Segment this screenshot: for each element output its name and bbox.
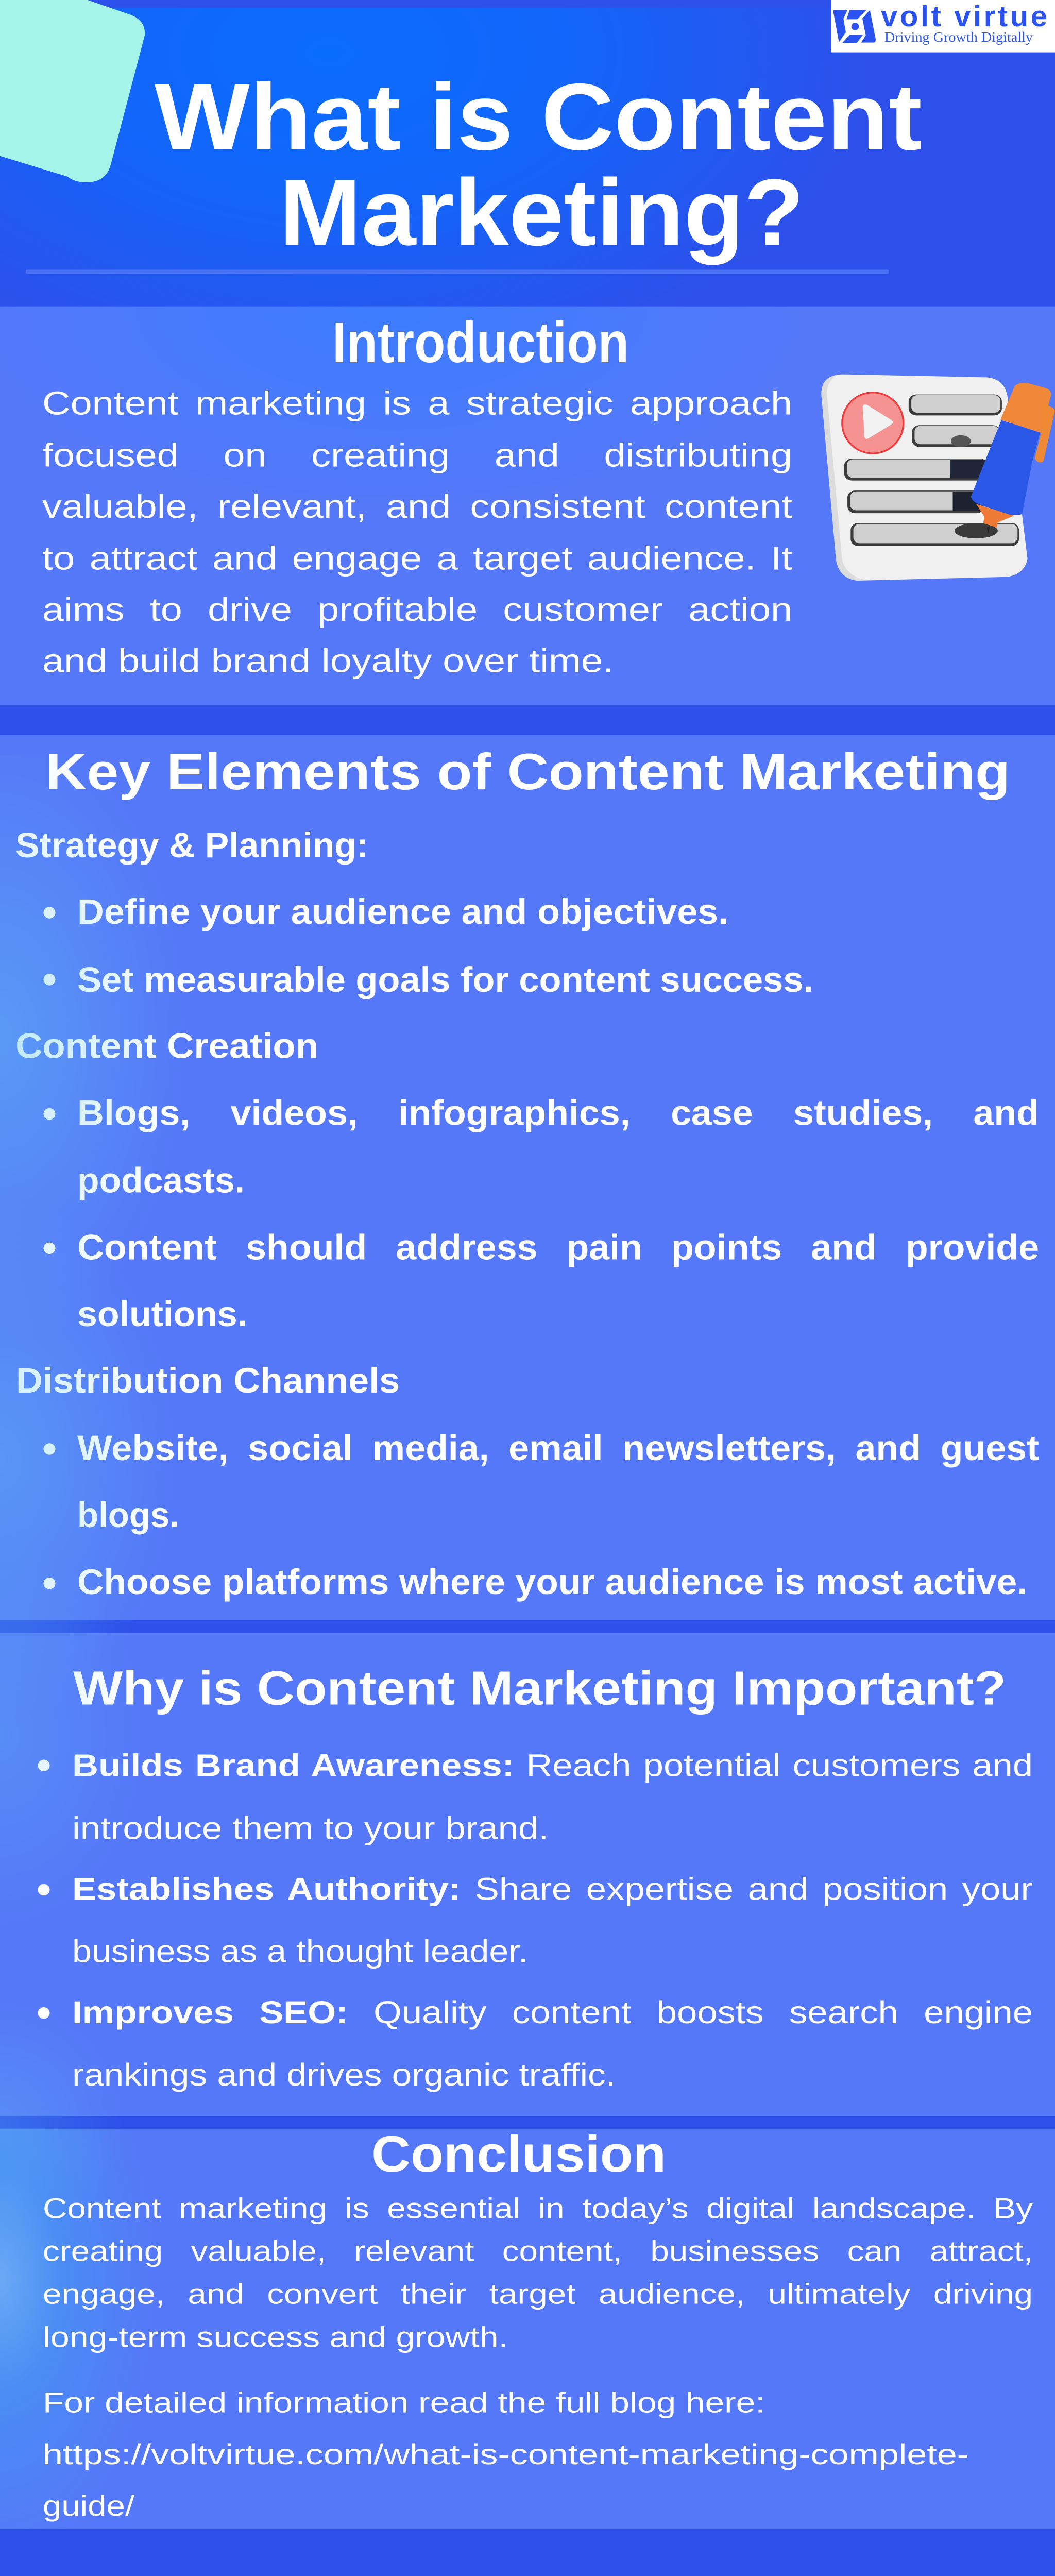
title underline bbox=[26, 269, 889, 274]
panel: header bbox=[0, 0, 1055, 307]
list: benefits: Builds Brand Awareness: Reach potential customers and bbox=[72, 1748, 1033, 1783]
group: Strategy & Planning: Define your audience and objectives. bbox=[77, 892, 728, 931]
heading: Why is Content Marketing Important?: Why is Content Marketing Important? bbox=[73, 1662, 1006, 1715]
decorative mint shape bbox=[0, 0, 145, 182]
group: Strategy & Planning bbox=[15, 826, 813, 999]
group: Distribution Channels bbox=[16, 1361, 1039, 1601]
group: Content Creation: Blogs, videos, infographics, case studies, and bbox=[77, 1093, 1039, 1132]
panel: key elements bbox=[0, 735, 1055, 1620]
group: Distribution Channels: blogs. bbox=[77, 1495, 179, 1535]
text: blog link: https://voltvirtue.com/what-is-content-marketing-complete- bbox=[43, 2438, 969, 2471]
text: introduction paragraph: Content marketing is a strategic approach bbox=[42, 384, 792, 421]
icon: document with play button and marker pen bbox=[821, 374, 1055, 581]
group: Content Creation: solutions. bbox=[77, 1295, 247, 1334]
list: benefits: introduce them to your brand. bbox=[72, 1811, 549, 1846]
logo name: volt virtue bbox=[881, 0, 1047, 32]
group: Content Creation: Content should address pain points and provide bbox=[77, 1228, 1039, 1267]
list: benefits: Establishes Authority: Share expertise and position your bbox=[72, 1872, 1033, 1907]
text: conclusion paragraph: long-term success and growth. bbox=[43, 2321, 508, 2353]
text: conclusion paragraph bbox=[43, 2193, 1033, 2353]
text: introduction paragraph: focused on creating and distributing bbox=[42, 436, 792, 473]
text: introduction paragraph: aims to drive profitable customer action bbox=[42, 591, 792, 628]
group: Strategy & Planning: Set measurable goals for content success. bbox=[77, 960, 813, 999]
group: Strategy & Planning: Strategy & Planning: bbox=[15, 826, 368, 865]
group: Distribution Channels: Distribution Channels bbox=[16, 1361, 400, 1400]
text: introduction paragraph: and build brand loyalty over time. bbox=[42, 642, 614, 679]
text: blog link bbox=[43, 2387, 969, 2522]
group: Distribution Channels: Choose platforms where your audience is most active. bbox=[77, 1562, 1027, 1601]
title: Marketing? bbox=[279, 160, 804, 265]
panel: conclusion bbox=[0, 2129, 1055, 2529]
group: Content Creation bbox=[15, 1026, 1039, 1334]
logo bbox=[831, 0, 1055, 53]
title: What is Content bbox=[155, 64, 922, 170]
list: benefits: Improves SEO: Quality content boosts search engine bbox=[72, 1995, 1033, 2030]
logo tagline: Driving Growth Digitally bbox=[884, 30, 1033, 45]
icon: logo mark bbox=[833, 10, 876, 43]
text: introduction paragraph: valuable, relevant, and consistent content bbox=[42, 487, 792, 525]
text: blog link: guide/ bbox=[43, 2490, 134, 2522]
text: conclusion paragraph: creating valuable, relevant content, businesses can attract, bbox=[43, 2235, 1033, 2268]
text: introduction paragraph: to attract and engage a target audience. It bbox=[42, 539, 792, 577]
heading: Conclusion: Conclusion bbox=[371, 2125, 666, 2182]
panel: why important bbox=[0, 1633, 1055, 2116]
heading: Key Elements of Content Marketing: Key Elements of Content Marketing bbox=[45, 743, 1010, 801]
group: Content Creation: podcasts. bbox=[77, 1161, 245, 1200]
panel: introduction bbox=[0, 307, 1055, 705]
list: benefits: business as a thought leader. bbox=[72, 1934, 528, 1969]
list: benefits bbox=[38, 1748, 1033, 2093]
text: conclusion paragraph: Content marketing is essential in today’s digital landscape. By bbox=[43, 2193, 1033, 2225]
list: benefits: rankings and drives organic traffic. bbox=[72, 2057, 616, 2093]
heading: Introduction: Introduction bbox=[332, 311, 629, 375]
header glow bbox=[0, 8, 1055, 307]
group: Distribution Channels: Website, social media, email newsletters, and guest bbox=[77, 1428, 1039, 1467]
title bbox=[155, 64, 922, 265]
text: blog link: For detailed information read the full blog here: bbox=[43, 2387, 765, 2419]
group: Content Creation: Content Creation bbox=[15, 1026, 318, 1065]
text: conclusion paragraph: engage, and convert their target audience, ultimately driving bbox=[43, 2278, 1033, 2311]
left edge glow overlay bbox=[0, 755, 361, 2314]
text: introduction paragraph bbox=[42, 384, 792, 679]
